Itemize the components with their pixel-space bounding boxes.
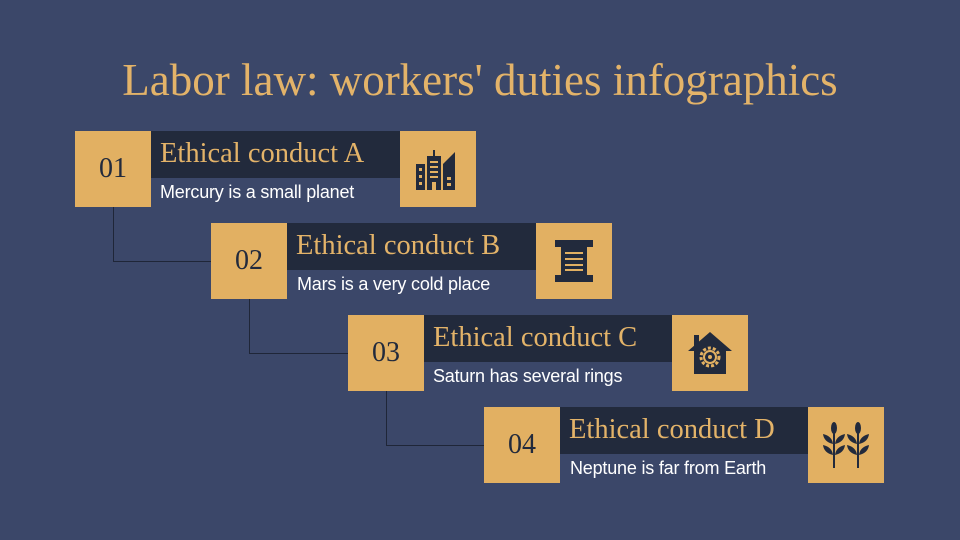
connector 2-3 (249, 299, 348, 354)
icon: wheat (808, 407, 884, 483)
text D: Neptune is far from Earth (570, 458, 766, 478)
number 01 (75, 131, 151, 207)
heading C (424, 315, 673, 362)
title: Labor law: workers' duties infographics (122, 55, 838, 105)
connector 3-4 (386, 391, 484, 446)
step 04 (484, 407, 884, 483)
heading A (151, 131, 400, 178)
connector 1-2 (113, 207, 211, 262)
number 03 (348, 315, 424, 391)
heading D: Ethical conduct D (569, 414, 775, 445)
number 04 (484, 407, 560, 483)
icon: buildings (400, 131, 476, 207)
heading B (287, 223, 536, 270)
icon: scroll (536, 223, 612, 299)
step 01 (75, 131, 476, 207)
text B: Mars is a very cold place (297, 274, 490, 294)
number 02 (211, 223, 287, 299)
step 03 (348, 315, 748, 391)
heading D (560, 407, 809, 454)
number 04: 04 (508, 429, 536, 460)
number 02: 02 (235, 245, 263, 276)
text C: Saturn has several rings (433, 366, 622, 386)
heading C: Ethical conduct C (433, 322, 637, 353)
heading B: Ethical conduct B (296, 230, 500, 261)
number 03: 03 (372, 337, 400, 368)
number 01: 01 (99, 153, 127, 184)
icon: house gear (672, 315, 748, 391)
step 02 (211, 223, 612, 299)
heading A: Ethical conduct A (160, 138, 364, 169)
text A: Mercury is a small planet (160, 182, 354, 202)
